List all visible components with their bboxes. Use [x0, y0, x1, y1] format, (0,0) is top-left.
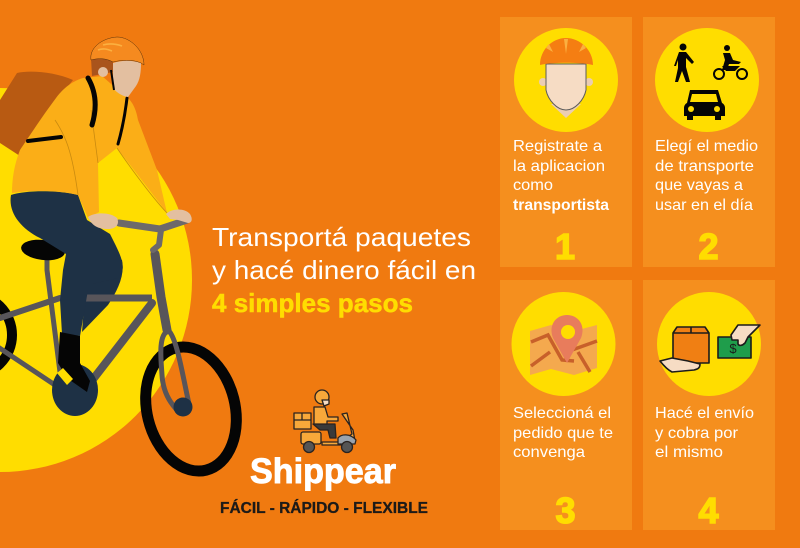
step 2 text: de transporte	[655, 158, 754, 175]
brand name: Shippear	[250, 452, 396, 491]
step 4 text: Hacé el envío	[655, 405, 754, 422]
step 3 text: Seleccioná el	[513, 405, 611, 422]
panel: step 1	[500, 17, 632, 267]
backpack straps	[28, 78, 127, 144]
number 1: 1	[555, 226, 575, 267]
far leg	[82, 240, 123, 332]
icon: car	[684, 90, 725, 120]
step 3 text	[513, 405, 613, 461]
backpack	[0, 72, 73, 156]
icon: banknote and hand: $	[729, 341, 737, 356]
logo: scooter courier icon	[294, 390, 356, 452]
number 3: 3	[555, 490, 576, 531]
icon: banknote and hand	[718, 325, 760, 358]
step 2 text: Elegí el medio	[655, 138, 758, 155]
tagline: FÁCIL - RÁPIDO - FLEXIBLE	[220, 498, 428, 517]
shoe	[58, 332, 90, 392]
panel: step 4	[643, 280, 775, 531]
step 1 text: transportista	[513, 197, 609, 214]
icon: pedestrian	[674, 44, 694, 82]
step 2 text: que vayas a	[655, 177, 743, 194]
number 2: 2	[698, 226, 719, 267]
step 4 text: y cobra por	[655, 425, 739, 442]
jacket shading	[55, 110, 167, 213]
headline: 4 simples pasos	[212, 288, 413, 318]
step 1 text: Registrate a	[513, 138, 602, 155]
yellow sun circle	[0, 88, 192, 472]
hands	[88, 210, 192, 229]
head	[91, 37, 144, 97]
jacket	[12, 76, 167, 218]
top tube	[86, 294, 152, 302]
step 1 text: como	[513, 177, 553, 194]
step 1 text: la aplicacion	[513, 158, 605, 175]
headline	[212, 222, 476, 318]
pedal	[57, 368, 73, 385]
step 4 text: el mismo	[655, 444, 723, 461]
headline: y hacé dinero fácil en	[212, 255, 476, 285]
step 4 text	[655, 405, 754, 461]
step 2 text: usar en el día	[655, 197, 753, 214]
icon: motorcycle	[714, 45, 747, 79]
step 3 text: convenga	[513, 444, 585, 461]
front hub	[174, 398, 192, 416]
front wheel	[133, 337, 249, 481]
trousers	[11, 191, 123, 336]
step 1 text	[513, 138, 609, 214]
number 4: 4	[698, 490, 719, 531]
icon: map with pin	[530, 315, 597, 375]
saddle	[20, 237, 66, 263]
chainring	[52, 364, 98, 416]
panel: step 2	[643, 17, 775, 267]
bicycle frame	[0, 220, 189, 409]
icon: box and hand	[660, 327, 709, 372]
panel: step 3	[500, 280, 632, 531]
icon: helmet and face	[539, 38, 593, 118]
rear wheel	[0, 294, 12, 376]
step 2 text	[655, 138, 758, 214]
illustration: cyclist on bicycle	[0, 37, 249, 481]
step 3 text: pedido que te	[513, 425, 613, 442]
headline: Transportá paquetes	[212, 222, 471, 252]
